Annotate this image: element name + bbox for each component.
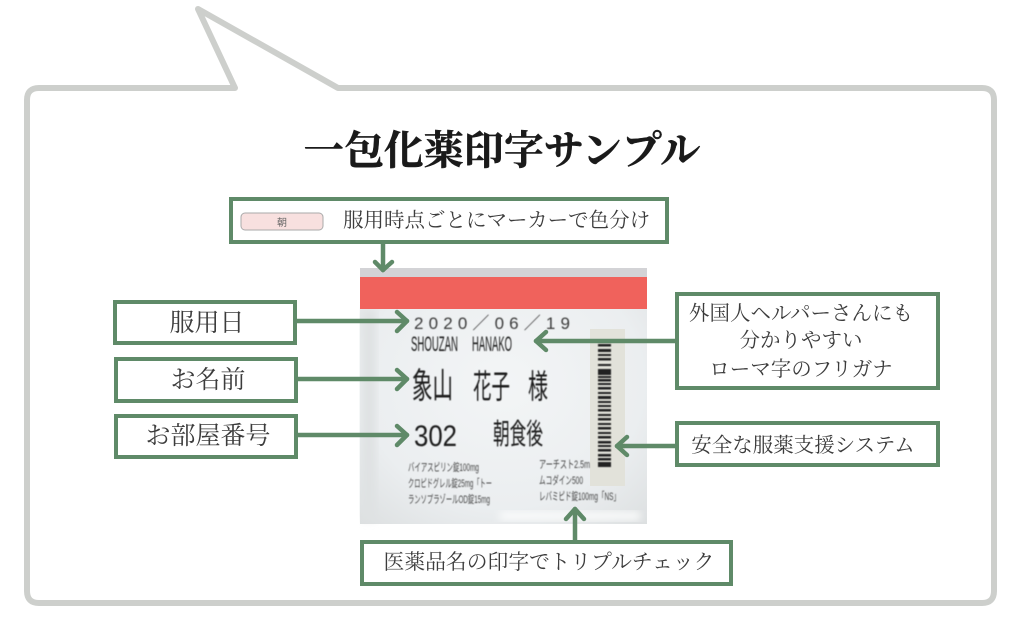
medicine packet photo [360,268,647,524]
callout: drug name triple check: 医薬品名の印字でトリプルチェック [384,551,714,574]
arrow: dose date [297,312,407,331]
callout: name [116,359,296,401]
printed text on packet [408,314,620,506]
callout: marker colour coding: 服用時点ごとにマーカーで色分け [343,209,650,232]
printed text on packet: ランソプラゾールOD錠15mg [408,493,490,506]
callout: dose date [115,302,295,343]
callout: drug name triple check [362,542,731,584]
callout: room number: お部屋番号 [145,422,271,450]
callout: marker colour coding [231,199,667,242]
printed text on packet: 朝食後 [493,418,543,451]
callout: dose date: 服用日 [169,310,245,337]
callout: safety system [677,423,938,465]
printed text on packet: バイアスピリン錠100mg [408,461,479,474]
printed text on packet: ムコダイン500 [539,473,583,487]
marker sample [241,213,323,230]
callout: name: お名前 [170,366,246,394]
arrow: room number [298,426,407,445]
arrow: marker to red band [375,243,392,270]
printed text on packet: 様 [528,368,548,405]
arrow: drug name [566,509,584,540]
arrow: name [298,370,407,389]
callout: safety system: 安全な服薬支援システム [691,434,915,457]
printed text on packet: 2020／06／19 [414,314,570,333]
barcode label [590,329,625,486]
title: 一包化薬印字サンプル [304,128,700,173]
printed text on packet: 象山 [412,367,453,406]
callout: romaji furigana [677,294,938,388]
printed text on packet: レバミピド錠100mg「NS」 [539,490,620,503]
arrow: safety system [617,437,675,455]
marker sample: 朝 [277,217,287,229]
printed text on packet: HANAKO [472,333,512,356]
callout: romaji furigana: 分かりやすい [740,329,862,352]
printed text on packet: 302 [414,420,457,453]
arrow: romaji furigana [536,332,675,350]
printed text on packet: SHOUZAN [411,333,458,356]
printed text on packet: アーチスト2.5m [539,458,590,471]
printed text on packet: クロピドグレル錠25mg「トー [408,476,492,490]
printed text on packet: 花子 [473,368,510,405]
red marker band [360,277,647,309]
callout: romaji furigana: 外国人ヘルパーさんにも [689,302,913,325]
callout: romaji furigana: ローマ字のフリガナ [709,358,893,381]
callout: room number [116,416,296,457]
